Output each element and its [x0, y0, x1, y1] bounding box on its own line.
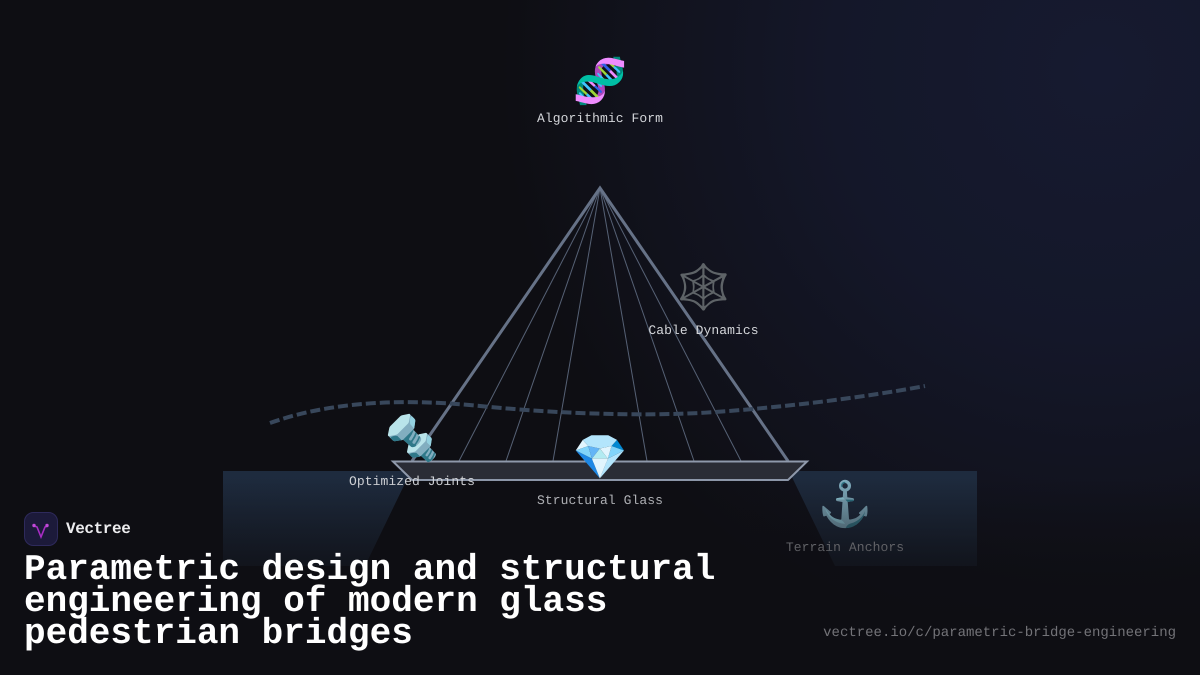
node: terrain anchors: ⚓ — [818, 478, 872, 530]
node: structural glass: Structural Glass — [537, 493, 663, 508]
node: optimized joints: 🔩 — [385, 412, 439, 464]
source url: vectree.io/c/parametric-bridge-engineering — [823, 625, 1176, 641]
brand name: Vectree — [66, 520, 130, 538]
glass deck — [393, 462, 807, 480]
title — [24, 548, 715, 654]
node: cable dynamics: 🕸️ — [676, 261, 731, 313]
suspension cables — [459, 188, 741, 461]
node: cable dynamics: Cable Dynamics — [648, 323, 759, 338]
title: Parametric design and structural — [24, 548, 715, 590]
title: pedestrian bridges — [24, 613, 413, 654]
right ground abutment — [789, 471, 977, 566]
left ground abutment — [223, 471, 411, 566]
node: cable dynamics — [648, 261, 759, 338]
node: algorithmic form: 🧬 — [573, 55, 627, 107]
node: optimized joints — [349, 412, 475, 489]
node: optimized joints: Optimized Joints — [349, 474, 475, 489]
pylon frame — [412, 188, 788, 461]
icon: vectree logo — [24, 512, 58, 546]
title: engineering of modern glass — [24, 581, 607, 622]
node: algorithmic form: Algorithmic Form — [537, 111, 663, 126]
brand — [24, 512, 130, 546]
node: terrain anchors: Terrain Anchors — [786, 540, 904, 555]
node: structural glass — [537, 431, 663, 508]
node: algorithmic form — [537, 55, 663, 126]
node: structural glass: 💎 — [573, 431, 627, 483]
node: terrain anchors — [786, 478, 904, 555]
dashed terrain curve — [270, 386, 925, 423]
